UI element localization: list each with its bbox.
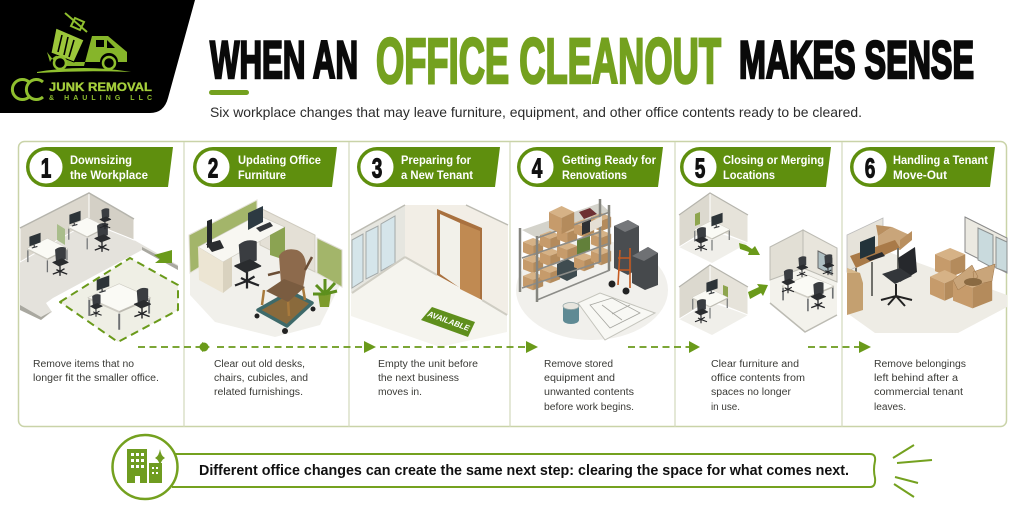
dashed flow arrows	[138, 341, 871, 353]
step 4 header: Getting Ready for	[562, 153, 656, 167]
step 5 header: Locations	[723, 168, 775, 182]
callout bar	[112, 435, 875, 499]
steps panel frame	[18, 142, 1006, 426]
step 1	[20, 147, 178, 384]
step 2 header	[193, 147, 337, 187]
step 5 header: 5	[695, 153, 705, 185]
subtitle: Six workplace changes that may leave furniture, equipment, and other office contents ready to be cleared.	[210, 104, 862, 120]
step 5 text: spaces no longer	[711, 387, 792, 398]
decorative rays	[893, 445, 932, 497]
step 1 text: longer fit the smaller office.	[33, 373, 159, 384]
step 1 header: 1	[41, 153, 51, 185]
step 6 text: commercial tenant	[874, 387, 963, 398]
title: OFFICE CLEANOUT	[376, 25, 721, 97]
step 3 text: the next business	[378, 373, 459, 384]
step 4 header: Renovations	[562, 168, 627, 182]
step 4 text: equipment and	[544, 373, 615, 384]
step 3 text: moves in.	[378, 387, 422, 398]
illustration: downsized office	[20, 193, 178, 342]
step 4 text: Remove stored	[544, 359, 613, 370]
step 4 text: before work begins.	[544, 402, 634, 413]
step 1 header: the Workplace	[70, 168, 148, 182]
step 4 text: unwanted contents	[544, 387, 634, 398]
step 6 text: leaves.	[874, 402, 906, 413]
logo monogram	[12, 79, 43, 99]
illustration: empty unit with door: AVAILABLE	[425, 309, 471, 333]
step 2 text: Clear out old desks,	[214, 359, 305, 370]
step 1 header	[26, 147, 173, 187]
step 2 text: related furnishings.	[214, 387, 303, 398]
logo panel	[0, 0, 195, 113]
step 2	[189, 147, 342, 398]
step 6 text: Remove belongings	[874, 359, 966, 370]
step 6 header: 6	[865, 153, 875, 185]
title: WHEN AN	[210, 31, 358, 90]
illustration: shelves, cabinets and plans	[516, 199, 668, 340]
step 5 text	[711, 359, 805, 413]
step 5 text: Clear furniture and	[711, 359, 799, 370]
step 5	[679, 147, 837, 413]
step 2 text: chairs, cubicles, and	[214, 373, 308, 384]
step 1 header: Downsizing	[70, 153, 132, 167]
step 1 text	[33, 359, 159, 384]
step 6 header: Handling a Tenant	[893, 153, 988, 167]
step 5 text: in use.	[711, 402, 740, 413]
step 6 text: left behind after a	[874, 373, 958, 384]
illustration: rooms merging	[679, 193, 837, 335]
icon: dump truck with bin	[37, 13, 131, 73]
step 1 text: Remove items that no	[33, 359, 134, 370]
step 3 header	[357, 147, 500, 187]
step 2 text	[214, 359, 308, 398]
title underline	[209, 90, 249, 95]
illustration: tenant move-out boxes	[847, 217, 1007, 333]
step 4 header: 4	[532, 153, 543, 185]
step 6 text	[874, 359, 966, 413]
step 4 text	[544, 359, 634, 413]
step 3 header: a New Tenant	[401, 168, 473, 182]
step 2 header: Updating Office	[238, 153, 321, 167]
step 4	[516, 147, 668, 413]
step 3 header: 3	[372, 153, 382, 185]
step 5 text: office contents from	[711, 373, 805, 384]
step 3 text	[378, 359, 478, 398]
illustration: empty unit with door	[351, 205, 508, 347]
step 6	[847, 147, 1007, 413]
step 6 header: Move-Out	[893, 168, 947, 182]
logo name: JUNK REMOVAL	[49, 80, 152, 94]
icon: office buildings	[112, 435, 178, 499]
step 3	[351, 147, 508, 398]
logo tagline: & HAULING LLC	[49, 95, 152, 102]
step 4 header	[517, 147, 663, 187]
step 6 header	[850, 147, 995, 187]
callout text: Different office changes can create the same next step: clearing the space for what comes next.	[199, 462, 849, 479]
step 2 header: Furniture	[238, 168, 286, 182]
step 3 text: Empty the unit before	[378, 359, 478, 370]
step 2 header: 2	[208, 153, 218, 185]
illustration: old cubicle and chair	[189, 200, 342, 337]
step 3 header: Preparing for	[401, 153, 471, 167]
step 5 header	[680, 147, 831, 187]
step 5 header: Closing or Merging	[723, 153, 824, 167]
